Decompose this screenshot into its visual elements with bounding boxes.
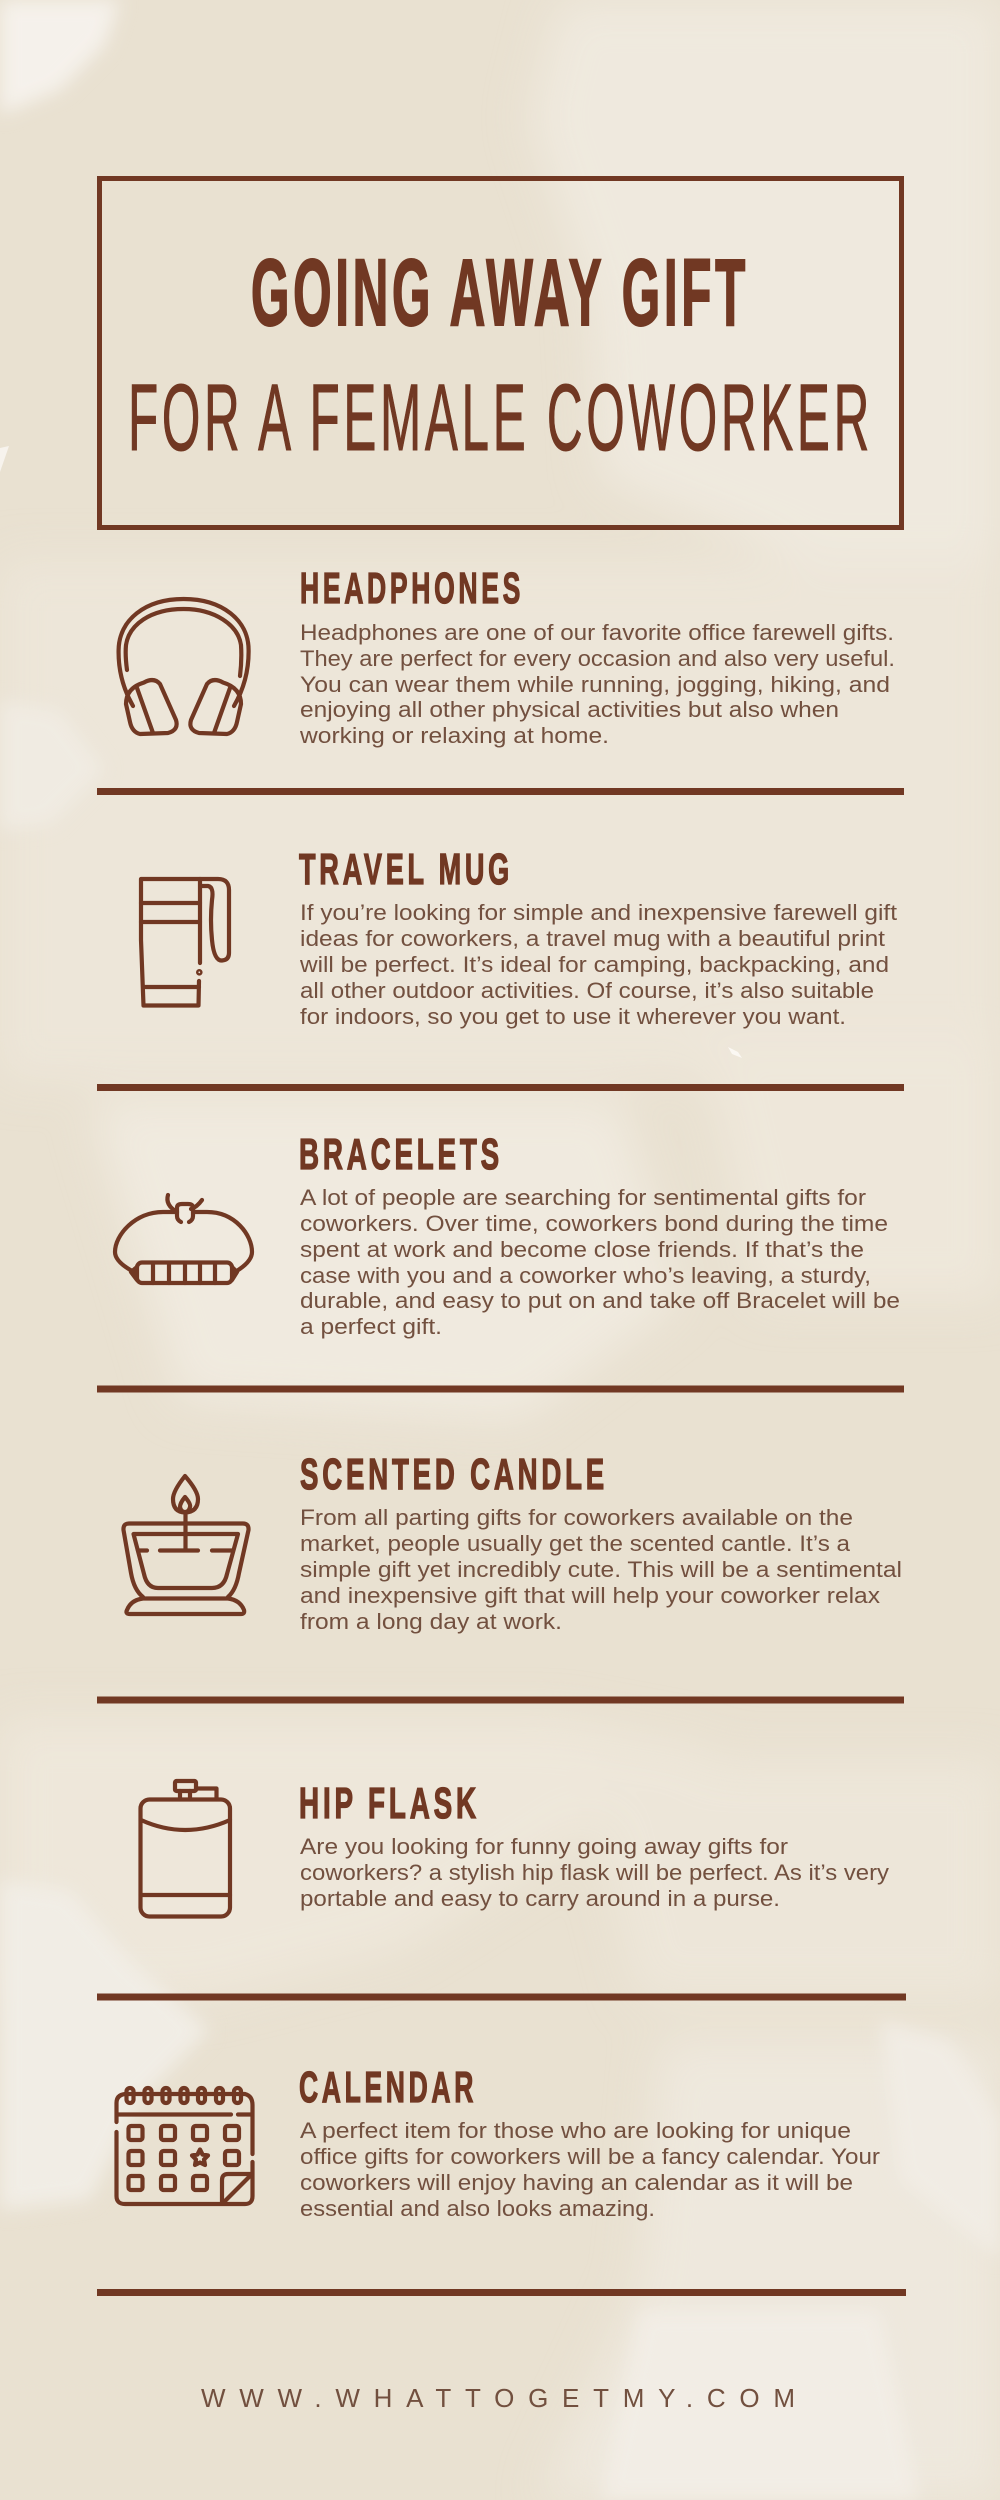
- title frame: [100, 178, 902, 528]
- heading: SCENTED CANDLE: [300, 1451, 608, 1499]
- body text: will be perfect. It’s ideal for camping, backpacking, and: [299, 952, 889, 977]
- body text: and inexpensive gift that will help your coworker relax: [300, 1583, 880, 1608]
- body text: coworkers will enjoy having an calendar as it will be: [300, 2170, 853, 2195]
- panel: travel mug: [141, 846, 897, 1029]
- body text: from a long day at work.: [300, 1609, 562, 1634]
- body text: office gifts for coworkers will be a fancy calendar. Your: [300, 2144, 880, 2169]
- body text: [300, 1185, 900, 1339]
- body text: Are you looking for funny going away gifts for: [300, 1834, 788, 1859]
- body text: working or relaxing at home.: [299, 723, 609, 748]
- icon: headphones: [119, 599, 249, 734]
- icon: candle: [123, 1476, 249, 1614]
- body text: market, people usually get the scented cantle. It’s a: [300, 1531, 851, 1556]
- body text: [300, 2118, 880, 2221]
- icon: calendar: [116, 2088, 252, 2204]
- body text: case with you and a coworker who’s leaving, a sturdy,: [300, 1263, 871, 1288]
- body text: coworkers? a stylish hip flask will be perfect. As it’s very: [300, 1860, 889, 1885]
- heading: TRAVEL MUG: [299, 846, 513, 894]
- body text: essential and also looks amazing.: [300, 2196, 655, 2221]
- panel: scented candle: [123, 1451, 902, 1634]
- panel: headphones: [119, 565, 895, 748]
- body text: You can wear them while running, jogging, hiking, and: [300, 672, 890, 697]
- body text: [299, 900, 897, 1029]
- body text: [300, 1505, 902, 1634]
- panel: calendar: [116, 2064, 880, 2221]
- body text: They are perfect for every occasion and also very useful.: [300, 646, 895, 671]
- icon: travel mug: [141, 879, 229, 1006]
- body text: [299, 620, 895, 748]
- body text: for indoors, so you get to use it wherever you want.: [300, 1004, 846, 1029]
- body text: spent at work and become close friends. If that’s the: [300, 1237, 864, 1262]
- body text: A lot of people are searching for sentimental gifts for: [300, 1185, 866, 1210]
- body text: coworkers. Over time, coworkers bond during the time: [300, 1211, 888, 1236]
- body text: Headphones are one of our favorite office farewell gifts.: [300, 620, 894, 645]
- heading: HEADPHONES: [300, 565, 524, 613]
- heading: CALENDAR: [299, 2064, 477, 2112]
- heading: BRACELETS: [299, 1131, 503, 1179]
- body text: all other outdoor activities. Of course, it’s also suitable: [300, 978, 874, 1003]
- body text: ideas for coworkers, a travel mug with a beautiful print: [300, 926, 885, 951]
- icon: bracelet: [115, 1195, 252, 1283]
- heading: HIP FLASK: [299, 1780, 480, 1828]
- panel: bracelets: [115, 1131, 900, 1339]
- body text: [300, 1834, 889, 1911]
- panel: hip flask: [140, 1780, 889, 1916]
- body text: If you’re looking for simple and inexpensive farewell gift: [300, 900, 897, 925]
- footer url: WWW.WHATTOGETMY.COM: [201, 2383, 795, 2413]
- body text: a perfect gift.: [300, 1314, 442, 1339]
- body text: A perfect item for those who are looking for unique: [300, 2118, 851, 2143]
- body text: From all parting gifts for coworkers available on the: [300, 1505, 853, 1530]
- body text: portable and easy to carry around in a purse.: [300, 1886, 780, 1911]
- body text: durable, and easy to put on and take off Bracelet will be: [300, 1288, 900, 1313]
- body text: enjoying all other physical activities but also when: [300, 697, 839, 722]
- icon: hip flask: [140, 1781, 230, 1916]
- body text: simple gift yet incredibly cute. This will be a sentimental: [300, 1557, 902, 1582]
